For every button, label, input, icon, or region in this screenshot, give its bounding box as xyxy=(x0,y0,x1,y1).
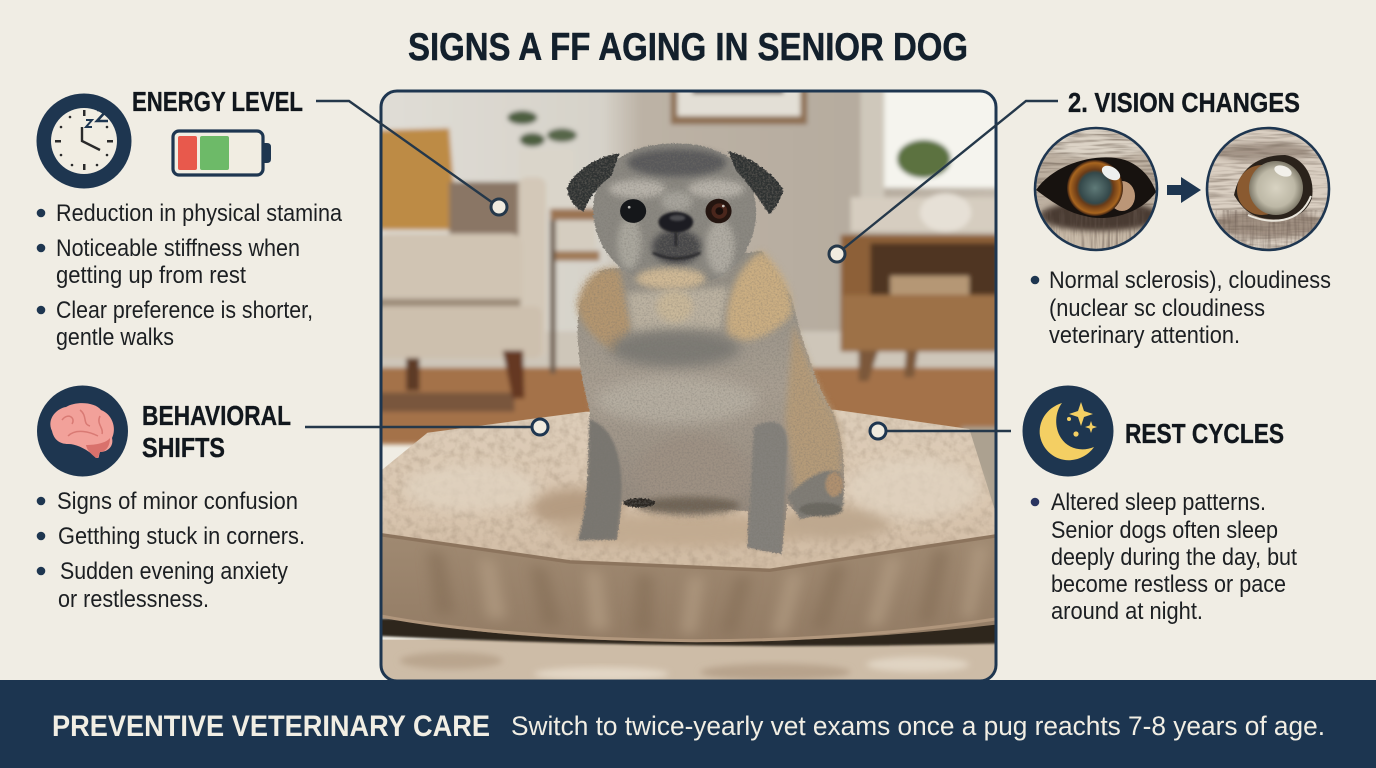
bullet text: rest cycles: Altered sleep patterns. xyxy=(1051,489,1266,516)
bullet list: energy level: getting up from rest xyxy=(56,262,246,289)
bullet text: rest cycles xyxy=(1031,489,1297,625)
panel: central dog photo xyxy=(372,82,1013,686)
icon: normal eye xyxy=(1034,126,1158,252)
wall and room background xyxy=(382,92,994,508)
icon: sleepy clock xyxy=(36,94,132,188)
arrow: progression xyxy=(1167,177,1201,203)
bullet list: energy level: Reduction in physical stamina xyxy=(56,200,342,227)
heading: rest cycles: REST CYCLES xyxy=(1125,418,1284,449)
bullet list: behavioral shifts: Getthing stuck in corners. xyxy=(58,523,305,550)
bullet list: behavioral shifts xyxy=(37,488,305,613)
footer heading: PREVENTIVE VETERINARY CARE xyxy=(52,710,490,743)
bullet text: vision changes xyxy=(1031,267,1331,349)
connector: energy level xyxy=(316,101,507,215)
icon: cloudy eye xyxy=(1205,125,1335,255)
connector: vision changes xyxy=(829,101,1058,262)
bullet text: vision changes: veterinary attention. xyxy=(1049,322,1240,349)
bullet list: energy level xyxy=(37,200,342,351)
heading: energy level: ENERGY LEVEL xyxy=(132,86,303,117)
bullet list: behavioral shifts: or restlessness. xyxy=(58,586,209,613)
heading: behavioral shifts: SHIFTS xyxy=(142,432,225,463)
bullet list: energy level: Noticeable stiffness when xyxy=(56,235,300,262)
title: SIGNS A FF AGING IN SENIOR DOG xyxy=(408,26,968,69)
bullet text: rest cycles: deeply during the day, but xyxy=(1051,544,1297,571)
bullet list: energy level: gentle walks xyxy=(56,324,174,351)
heading: vision changes: 2. VISION CHANGES xyxy=(1068,87,1300,118)
photo border xyxy=(381,91,996,681)
bullet text: vision changes: (nuclear sc cloudiness xyxy=(1049,295,1265,322)
icon: low battery xyxy=(173,131,271,175)
footer banner xyxy=(0,680,1376,768)
bullet list: energy level: Clear preference is shorter, xyxy=(56,297,313,324)
bullet text: vision changes: Normal sclerosis), cloudiness xyxy=(1049,267,1331,294)
pug face xyxy=(620,199,732,259)
dog bed xyxy=(376,410,1009,686)
pug xyxy=(567,143,844,554)
bullet text: rest cycles: around at night. xyxy=(1051,598,1203,625)
bullet text: rest cycles: Senior dogs often sleep xyxy=(1051,517,1278,544)
icon: moon and stars xyxy=(1022,386,1114,476)
footer message: Switch to twice-yearly vet exams once a pug reachts 7-8 years of age. xyxy=(511,711,1325,741)
heading: behavioral shifts xyxy=(142,400,291,463)
panel: vision changes xyxy=(1030,87,1335,349)
connector: rest cycles xyxy=(870,423,1011,439)
bullet text: rest cycles: become restless or pace xyxy=(1051,571,1286,598)
heading: behavioral shifts: BEHAVIORAL xyxy=(142,400,291,431)
panel: behavioral shifts xyxy=(37,386,305,613)
panel: energy level xyxy=(36,86,342,351)
bullet list: behavioral shifts: Sudden evening anxiety xyxy=(60,558,289,585)
connector: behavioral shifts xyxy=(305,419,548,435)
bullet list: behavioral shifts: Signs of minor confusion xyxy=(57,488,298,515)
icon: brain xyxy=(37,386,128,476)
panel: rest cycles xyxy=(1022,386,1297,625)
